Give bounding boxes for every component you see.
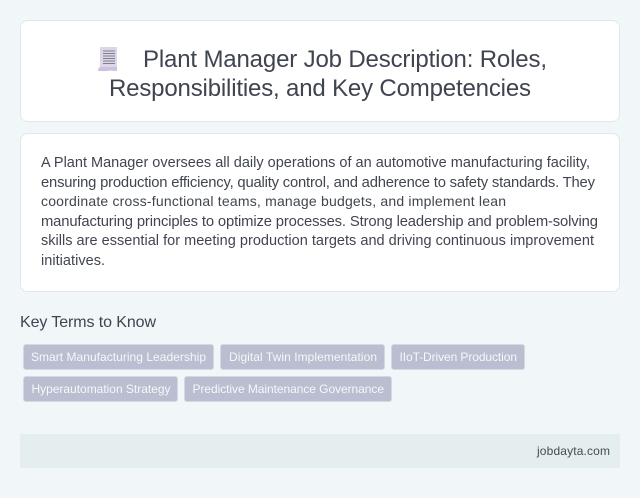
description text: skills are essential for meeting production targets and driving continuous improvement [41, 233, 594, 249]
panel: description [20, 134, 620, 292]
title [109, 46, 547, 102]
footer source text: jobdayta.com [536, 444, 610, 458]
title: Plant Manager Job Description: Roles, [143, 46, 547, 73]
title: Responsibilities, and Key Competencies [109, 75, 531, 102]
description text [41, 155, 598, 269]
footer bar [20, 434, 620, 468]
panel: title card [20, 20, 620, 122]
tag: Digital Twin Implementation [220, 344, 384, 370]
tag: IIoT-Driven Production [392, 344, 524, 370]
description text: ensuring production efficiency, quality control, and adherence to safety standards. They [41, 175, 596, 191]
tag: Smart Manufacturing Leadership [24, 344, 214, 370]
tag: Hyperautomation Strategy [24, 376, 178, 402]
tag: Smart Manufacturing Leadership: Smart Manufacturing Leadership [31, 350, 206, 364]
tag: Predictive Maintenance Governance [184, 376, 392, 402]
heading: key terms: Key Terms to Know [20, 314, 156, 331]
tag: Digital Twin Implementation: Digital Twin Implementation [229, 350, 377, 364]
tag: Hyperautomation Strategy: Hyperautomation Strategy [32, 382, 170, 396]
description text: coordinate cross-functional teams, manage budgets, and implement lean [41, 193, 506, 209]
description text: initiatives. [41, 253, 105, 269]
icon: document scroll [98, 47, 117, 71]
tag: IIoT-Driven Production: IIoT-Driven Production [400, 350, 517, 364]
description text: manufacturing principles to optimize processes. Strong leadership and problem-solving [41, 214, 598, 230]
tag: Predictive Maintenance Governance: Predictive Maintenance Governance [192, 382, 384, 396]
description text: A Plant Manager oversees all daily operations of an automotive manufacturing facility, [41, 155, 590, 171]
